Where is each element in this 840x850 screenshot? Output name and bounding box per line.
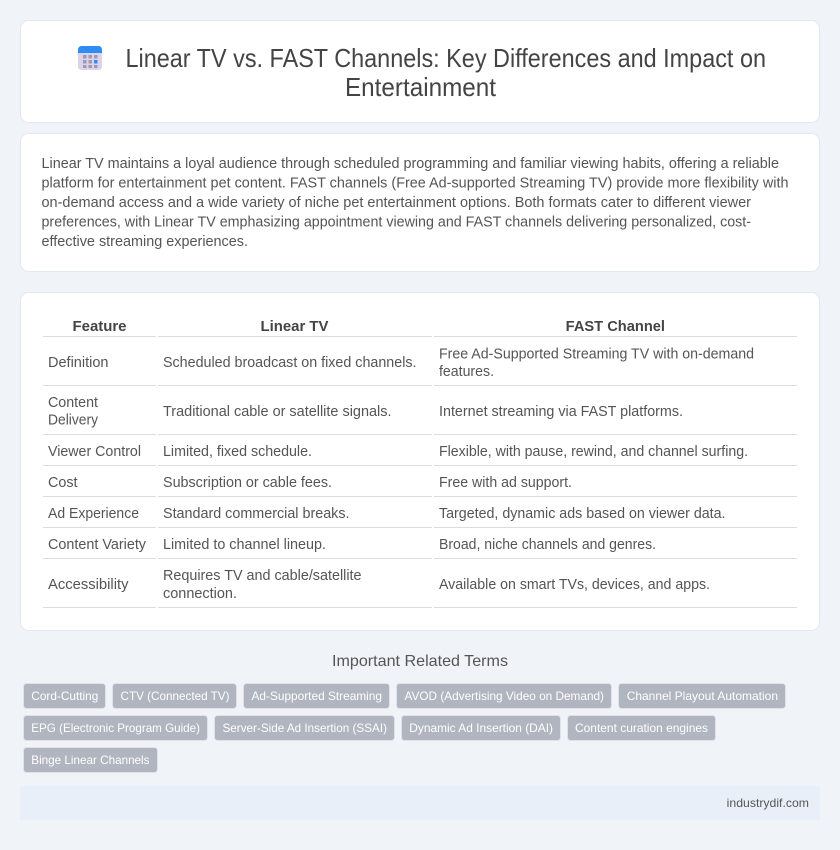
table row: definition: features. <box>439 364 494 380</box>
title: Linear TV vs. FAST Channels: Key Differences and Impact on <box>126 45 766 73</box>
tag: channel playout automation <box>618 684 786 708</box>
tag: avod: AVOD (Advertising Video on Demand) <box>404 689 604 703</box>
table row: definition: Scheduled broadcast on fixed channels. <box>163 355 416 371</box>
title: Entertainment <box>345 74 496 102</box>
text block: introduction paragraph <box>42 156 788 250</box>
table row: definition <box>48 346 754 380</box>
table row: content delivery: Traditional cable or satellite signals. <box>163 404 392 420</box>
tag: avod <box>396 684 612 708</box>
tag: ssai <box>214 716 394 740</box>
panel: title card <box>20 20 820 122</box>
table header row: FAST Channel <box>566 319 665 335</box>
table row: accessibility: Accessibility <box>48 577 129 593</box>
table row: ad experience: Targeted, dynamic ads based on viewer data. <box>439 506 726 522</box>
table row: content variety: Broad, niche channels and genres. <box>439 537 656 553</box>
table row: viewer control: Limited, fixed schedule. <box>163 444 312 460</box>
text block: introduction paragraph: Linear TV maintains a loyal audience through scheduled programming and familiar viewing habits, offering a reliable <box>42 156 779 172</box>
text block: introduction paragraph: preferences, with Linear TV emphasizing appointment viewing and FAST channels delivering personalized, cost- <box>42 214 751 230</box>
table row: ad experience: Standard commercial breaks. <box>163 506 350 522</box>
table row: ad experience: Ad Experience <box>48 506 139 522</box>
table row: content delivery <box>48 395 683 428</box>
table row: accessibility: connection. <box>163 586 237 602</box>
table row: cost <box>48 475 572 491</box>
table row: content delivery: Delivery <box>48 412 99 428</box>
tag: binge linear channels: Binge Linear Channels <box>31 753 149 767</box>
table row: viewer control: Viewer Control <box>48 444 141 460</box>
table row: cost: Subscription or cable fees. <box>163 475 332 491</box>
tag: dai: Dynamic Ad Insertion (DAI) <box>409 721 553 735</box>
text block: introduction paragraph: on-demand access and a wide variety of niche pet entertainment options. Both formats cater to different viewer <box>42 195 751 211</box>
table header row: Linear TV <box>260 319 329 335</box>
table row: viewer control: Flexible, with pause, rewind, and channel surfing. <box>439 444 748 460</box>
tag group: related terms <box>24 684 786 772</box>
icon: calendar <box>78 46 102 70</box>
table row: content variety <box>48 537 656 553</box>
tag: ctv <box>112 684 236 708</box>
tag: content curation engines: Content curation engines <box>575 721 708 735</box>
tag: cord-cutting <box>24 684 106 708</box>
tag: binge linear channels <box>24 748 158 772</box>
table row: definition: Definition <box>48 355 108 371</box>
table row: accessibility: Requires TV and cable/satellite <box>163 568 362 584</box>
text block: introduction paragraph: platform for entertainment pet content. FAST channels (Free Ad-supported Streaming TV) provide more flexibility with <box>42 176 788 192</box>
table header row <box>72 319 665 335</box>
panel: introduction <box>20 134 820 272</box>
table row: content variety: Content Variety <box>48 537 147 553</box>
tag: cord-cutting: Cord-Cutting <box>31 689 98 703</box>
tag: ssai: Server-Side Ad Insertion (SSAI) <box>222 721 387 735</box>
tag: content curation engines <box>568 716 716 740</box>
tag: dai <box>402 716 560 740</box>
table header row: Feature <box>72 319 126 335</box>
tag: ad-supported streaming <box>244 684 390 708</box>
tag: epg: EPG (Electronic Program Guide) <box>31 721 200 735</box>
table row: content delivery: Content <box>48 395 98 411</box>
table row: accessibility <box>48 568 710 602</box>
tag: ad-supported streaming: Ad-Supported Streaming <box>252 689 382 703</box>
table row: cost: Free with ad support. <box>439 475 572 491</box>
table row: ad experience <box>48 506 726 522</box>
table row: cost: Cost <box>48 475 78 491</box>
heading: important related terms: Important Related Terms <box>332 653 508 670</box>
table row: content delivery: Internet streaming via FAST platforms. <box>439 404 683 420</box>
title <box>126 45 766 102</box>
table row: accessibility: Available on smart TVs, devices, and apps. <box>439 577 710 593</box>
text block: introduction paragraph: effective streaming experiences. <box>42 234 248 250</box>
footer <box>20 786 820 820</box>
tag: ctv: CTV (Connected TV) <box>120 689 230 703</box>
footer: industrydif.com <box>727 796 809 810</box>
table row: viewer control <box>48 444 748 460</box>
table row: definition: Free Ad-Supported Streaming TV with on-demand <box>439 346 754 362</box>
panel: comparison table <box>20 292 820 630</box>
table row: content variety: Limited to channel lineup. <box>163 537 326 553</box>
tag: channel playout automation: Channel Playout Automation <box>627 689 778 703</box>
tag: epg <box>24 716 208 740</box>
